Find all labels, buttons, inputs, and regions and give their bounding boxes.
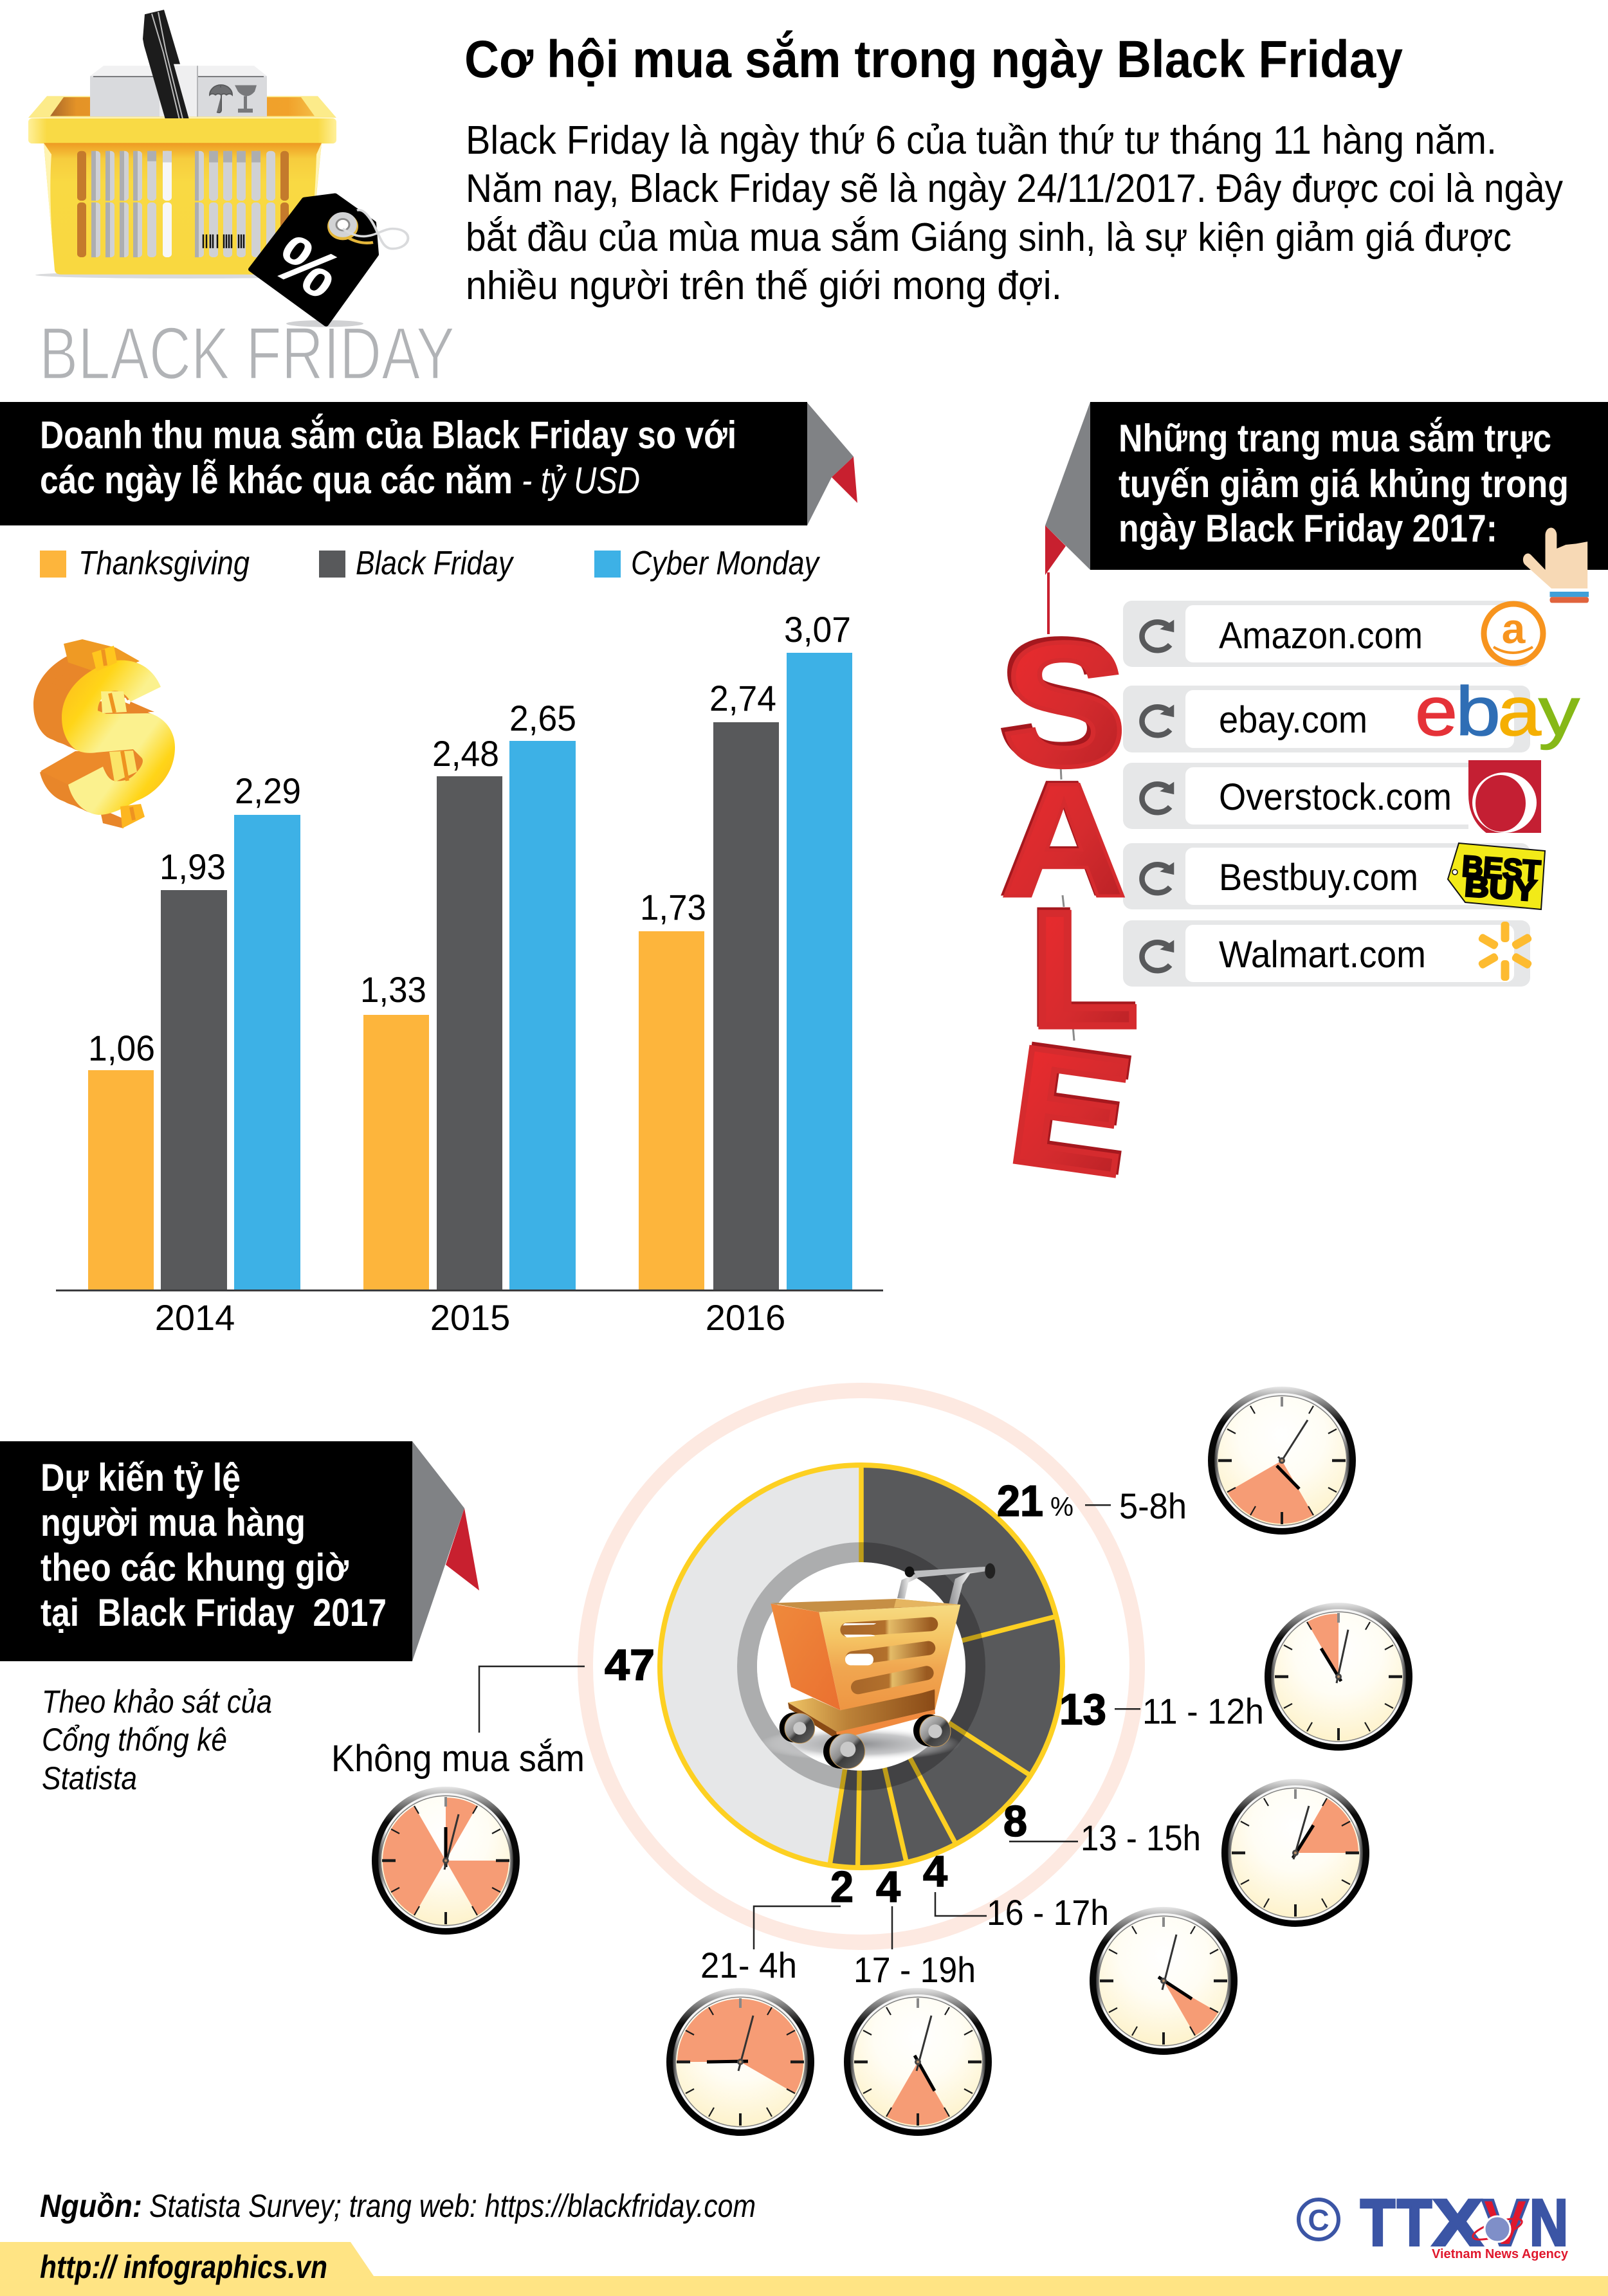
letter A: A bbox=[1001, 749, 1128, 931]
panel heading: revenue chart: các ngày lễ khác qua các năm bbox=[40, 459, 513, 502]
logo: TTXVN Vietnam News Agency: C bbox=[1308, 2203, 1329, 2237]
clock: 17-19h bbox=[844, 1988, 992, 2136]
label 13 11-12h bbox=[1059, 1685, 1264, 1734]
label 4 16-17h bbox=[923, 1847, 1109, 1933]
row: Best Buy bbox=[1123, 843, 1530, 909]
handle bbox=[897, 1563, 995, 1605]
clock: not shopping bbox=[372, 1787, 520, 1935]
text: survey note: Theo khảo sát của bbox=[42, 1684, 272, 1720]
letter L: L bbox=[1029, 876, 1137, 1059]
panel heading: share of shoppers by time: tại Black Friday 2017 bbox=[41, 1591, 387, 1634]
label 8 13-15h: 13 - 15h bbox=[1081, 1818, 1201, 1858]
value labels: 1,73 bbox=[640, 887, 706, 927]
text: survey note: Statista bbox=[42, 1760, 137, 1796]
row: Walmart: Walmart.com bbox=[1219, 934, 1426, 976]
letter L: L bbox=[1030, 879, 1138, 1061]
label 21% 5-8h bbox=[997, 1477, 1187, 1526]
logo: Overstock bbox=[1468, 760, 1541, 834]
intro paragraph: nhiều người trên thế giới mong đợi. bbox=[466, 264, 1062, 308]
clock: 5-8h bbox=[1208, 1387, 1356, 1535]
chart legend bbox=[40, 545, 821, 582]
icon: pointing hand bbox=[1523, 528, 1589, 603]
label 47 no shopping: 47 bbox=[605, 1641, 655, 1690]
label 21% 5-8h: 21 bbox=[997, 1477, 1043, 1526]
panel heading: online shopping sites bbox=[1045, 402, 1608, 634]
logo: eBay: y bbox=[1539, 672, 1580, 750]
row: Amazon bbox=[1123, 601, 1530, 667]
label 47 no shopping: Không mua sắm bbox=[331, 1738, 585, 1780]
barcode bbox=[203, 234, 244, 248]
value labels: 2,65 bbox=[509, 698, 576, 738]
label 13 11-12h: 11 - 12h bbox=[1142, 1691, 1264, 1731]
letter E: E bbox=[1002, 1008, 1143, 1208]
clock: 16-17h bbox=[1090, 1907, 1238, 2055]
label 13 11-12h: 13 bbox=[1059, 1685, 1106, 1734]
box bbox=[90, 66, 267, 116]
bars 2014 bbox=[88, 815, 300, 1290]
logo: eBay bbox=[1415, 672, 1580, 750]
logo: eBay: e bbox=[1415, 672, 1457, 750]
panel heading: share of shoppers by time: người mua hàng bbox=[41, 1501, 306, 1544]
icon: yellow shopping basket with box bbox=[28, 10, 338, 278]
bar chart: revenue by year bbox=[56, 609, 883, 1338]
source line: Statista Survey; trang web: https://blackfriday.com bbox=[149, 2188, 756, 2224]
chart labels: percentages and time slots bbox=[331, 1477, 1264, 1990]
panel heading: online shopping sites: ngày Black Friday 2017: bbox=[1119, 507, 1497, 550]
logo: eBay: b bbox=[1456, 672, 1501, 750]
label 2 21-4h: 21- 4h bbox=[700, 1945, 797, 1985]
icon: black price tag with percent: % bbox=[259, 222, 356, 312]
logo: Best Buy: BUY bbox=[1463, 869, 1538, 907]
panel heading: online shopping sites: Những trang mua sắm trực bbox=[1119, 417, 1551, 460]
value labels: 1,06 bbox=[88, 1028, 155, 1068]
logo: TTXVN Vietnam News Agency: T bbox=[1397, 2186, 1432, 2259]
letter A: A bbox=[999, 747, 1126, 929]
chart legend: Cyber Monday bbox=[631, 545, 821, 582]
row: Best Buy: Bestbuy.com bbox=[1219, 857, 1418, 898]
intro paragraph bbox=[466, 118, 1563, 308]
value labels: 2,29 bbox=[235, 770, 301, 811]
label 8 13-15h: 8 bbox=[1003, 1797, 1027, 1846]
intro paragraph: bắt đầu của mùa mua sắm Giáng sinh, là sự kiện giảm giá được bbox=[466, 215, 1512, 260]
letter E: E bbox=[1000, 1012, 1140, 1211]
label 4 16-17h: 16 - 17h bbox=[987, 1892, 1109, 1933]
row: eBay: ebay.com bbox=[1219, 699, 1367, 741]
text: survey note bbox=[42, 1684, 272, 1796]
logo: Best Buy: BEST bbox=[1461, 849, 1542, 888]
logo: Best Buy bbox=[1448, 843, 1545, 909]
year labels: 2015 bbox=[430, 1297, 510, 1338]
clock: 11-12h bbox=[1265, 1603, 1412, 1751]
label 4 16-17h: 4 bbox=[923, 1847, 947, 1896]
row: Amazon: Amazon.com bbox=[1219, 615, 1423, 657]
row: Overstock: Overstock.com bbox=[1219, 776, 1452, 818]
intro paragraph: Black Friday là ngày thứ 6 của tuần thứ tư tháng 11 hàng năm. bbox=[466, 118, 1497, 163]
panel heading: revenue chart: - tỷ USD bbox=[522, 460, 640, 502]
icon: black price tag with percent bbox=[251, 196, 408, 327]
logo: Amazon: a bbox=[1502, 605, 1526, 652]
wheels bbox=[780, 1713, 951, 1769]
panel heading: share of shoppers by time: theo các khung giờ bbox=[41, 1546, 349, 1589]
label 4 17-19h: 17 - 19h bbox=[854, 1949, 976, 1990]
logo: TTXVN Vietnam News Agency: V bbox=[1482, 2186, 1528, 2259]
icon: 3D dollar sign bbox=[33, 639, 175, 828]
source line: Nguồn: bbox=[40, 2188, 142, 2224]
logo: Amazon bbox=[1484, 604, 1543, 663]
cart slots bbox=[847, 1624, 931, 1687]
row: eBay bbox=[1123, 686, 1530, 752]
value labels: 2,74 bbox=[709, 678, 776, 718]
logo: TTXVN Vietnam News Agency: T bbox=[1360, 2186, 1395, 2259]
value labels: 2,48 bbox=[432, 733, 499, 774]
value labels: 3,07 bbox=[784, 609, 851, 650]
logo: Walmart spark bbox=[1477, 922, 1533, 981]
footer band with URL bbox=[0, 2242, 1608, 2296]
footer band with URL: http:// infographics.vn bbox=[40, 2249, 327, 2285]
year labels: 2014 bbox=[155, 1297, 235, 1338]
panel heading: share of shoppers by time bbox=[0, 1441, 479, 1661]
icon: shopping cart bbox=[759, 1563, 995, 1769]
value labels: 1,93 bbox=[160, 846, 226, 887]
label 47 no shopping bbox=[331, 1641, 655, 1780]
year labels bbox=[155, 1297, 785, 1338]
text: BLACK FRIDAY watermark: BLACK FRIDAY bbox=[39, 313, 455, 395]
title: Cơ hội mua sắm trong ngày Black Friday bbox=[464, 30, 1403, 89]
panel heading: revenue chart: Doanh thu mua sắm của Black Friday so với bbox=[40, 414, 736, 457]
logo: TTXVN Vietnam News Agency: N bbox=[1530, 2186, 1568, 2259]
bars 2015 bbox=[363, 741, 576, 1290]
donut chart: shoppers by time slot bbox=[585, 1390, 1137, 1942]
row: Walmart bbox=[1123, 920, 1530, 987]
text: survey note: Cổng thống kê bbox=[42, 1722, 227, 1758]
value labels bbox=[88, 609, 851, 1068]
SALE hanging 3D letters bbox=[998, 602, 1143, 1211]
letter S: S bbox=[1002, 606, 1127, 803]
panel heading: revenue chart bbox=[0, 402, 857, 525]
label 21% 5-8h: % bbox=[1050, 1491, 1074, 1522]
label 8 13-15h bbox=[1003, 1797, 1201, 1858]
chart legend: Black Friday bbox=[356, 545, 515, 582]
label 21% 5-8h: 5-8h bbox=[1119, 1486, 1187, 1526]
handle bbox=[143, 10, 196, 140]
label 4 17-19h: 4 bbox=[876, 1863, 900, 1911]
panel heading: share of shoppers by time: Dự kiến tỷ lệ bbox=[41, 1456, 241, 1499]
value labels: 1,33 bbox=[360, 969, 426, 1010]
list: shopping sites bbox=[1123, 601, 1580, 987]
letter S: S bbox=[998, 602, 1123, 799]
year labels: 2016 bbox=[706, 1297, 785, 1338]
label 2 21-4h bbox=[700, 1863, 854, 1985]
chart legend: Thanksgiving bbox=[78, 545, 250, 582]
label 2 21-4h: 2 bbox=[830, 1863, 854, 1911]
logo: TTXVN Vietnam News Agency bbox=[1299, 2186, 1569, 2261]
clock: 21-4h bbox=[666, 1988, 814, 2136]
logo: TTXVN Vietnam News Agency: Vietnam News Agency bbox=[1432, 2247, 1569, 2261]
logo: eBay: a bbox=[1497, 672, 1542, 750]
logo: TTXVN Vietnam News Agency: X bbox=[1432, 2186, 1483, 2259]
bars 2016 bbox=[639, 653, 852, 1290]
clock: 13-15h bbox=[1221, 1779, 1369, 1927]
basket slots bbox=[77, 151, 289, 257]
row: Overstock bbox=[1123, 763, 1530, 829]
label 4 17-19h bbox=[854, 1863, 976, 1990]
